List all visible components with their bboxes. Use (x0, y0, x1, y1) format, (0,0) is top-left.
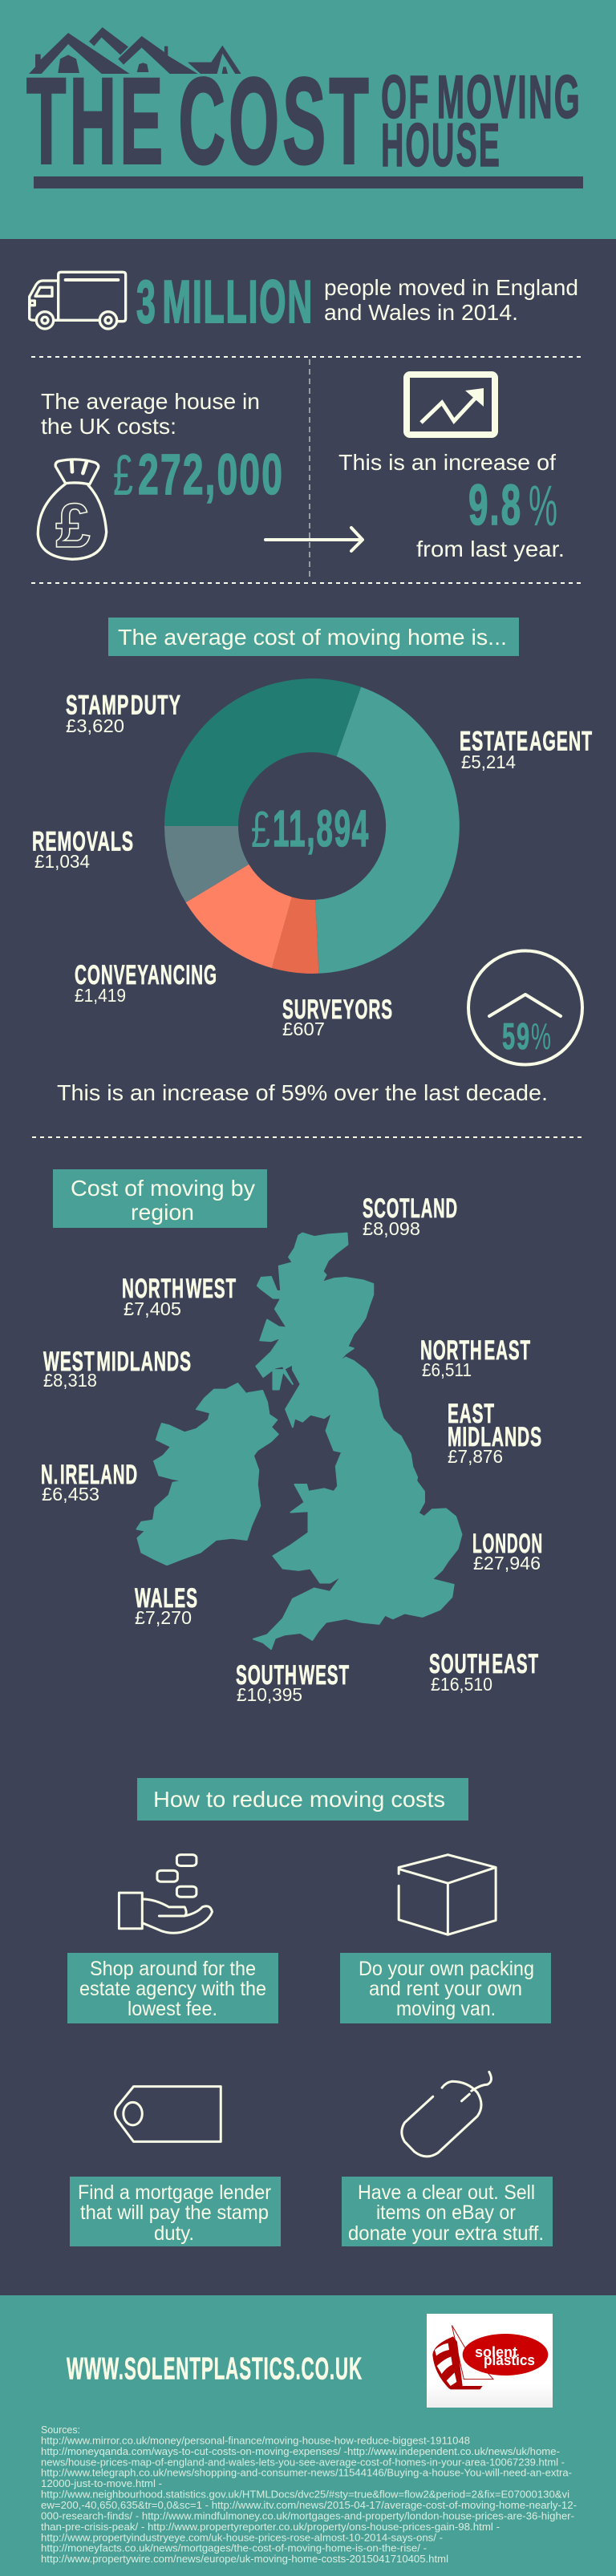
panel: footer (0, 2295, 616, 2576)
icon: 59 percent roof badge: 59 (502, 1015, 531, 1057)
label: removals (32, 826, 134, 872)
donut chart (164, 678, 460, 974)
icon: cardboard box (399, 1855, 496, 1934)
label: stamp duty (66, 690, 181, 736)
label: West Midlands: WEST MIDLANDS (43, 1347, 192, 1377)
donut chart: £ (251, 800, 270, 858)
label: South West: SOUTH WEST (236, 1660, 350, 1691)
sources: ew=200,-40,650,635&tr=0,0&sc=1 - http://www.itv.com/news/2015-04-17/average-cost-of-moving-home-nearly-12- (41, 2499, 577, 2511)
label: North East (420, 1335, 531, 1380)
sources: 12000-just-to-move.html - (41, 2477, 162, 2489)
icon: house roofs (29, 27, 241, 74)
text: average house: the UK costs: (41, 414, 176, 439)
logo: Solent Plastics (427, 2314, 553, 2408)
sources: http://moneyfacts.co.uk/news/mortgages/the-cost-of-moving-home-is-on-the-rise/ - (41, 2542, 427, 2554)
tip: clear out (342, 2177, 553, 2246)
label: N. Ireland: N. IRELAND (41, 1460, 138, 1490)
icon: rising chart (407, 375, 495, 435)
sources: http://www.propertyindustryeye.com/uk-house-prices-rose-almost-10-2014-says-ons/ - (41, 2531, 443, 2543)
text: decade increase: This is an increase of 59% over the last decade. (57, 1080, 548, 1105)
statistic: 9.8 percent: 9.8 (468, 474, 522, 537)
icon: removal truck (30, 272, 126, 329)
icon: 59 percent roof badge (468, 951, 582, 1065)
label: surveyors: SURVEYORS (282, 994, 393, 1025)
text: people moved: people moved in England (324, 275, 578, 300)
tip: own packing: and rent your own (369, 1978, 522, 2000)
label: South West: £10,395 (237, 1684, 302, 1705)
label: conveyancing: CONVEYANCING (75, 960, 217, 990)
header panel (0, 0, 616, 239)
icon: 59 percent roof badge: % (531, 1015, 551, 1057)
label: South East: SOUTH EAST (429, 1649, 539, 1679)
tip: mortgage lender: Find a mortgage lender (78, 2181, 271, 2204)
label: East Midlands: £7,876 (448, 1446, 503, 1467)
label: North East: £6,511 (422, 1359, 472, 1380)
heading: cost by region: Cost of moving by (71, 1176, 255, 1201)
label: Scotland (363, 1193, 458, 1239)
panel: 3 million movers (30, 268, 578, 335)
label: estate agent: £5,214 (461, 751, 516, 772)
text: average house (41, 389, 260, 439)
label: North West (122, 1274, 237, 1319)
icon: price tag (116, 2087, 221, 2141)
tip: own packing: Do your own packing (359, 1958, 534, 1980)
label: conveyancing: £1,419 (75, 985, 126, 1006)
panel: average house price (38, 375, 565, 561)
label: North West: NORTH WEST (122, 1274, 237, 1304)
label: West Midlands: £8,318 (43, 1370, 97, 1391)
tip: mortgage lender (70, 2177, 281, 2246)
tip: mortgage lender: duty. (154, 2222, 194, 2245)
label: Scotland: SCOTLAND (363, 1193, 458, 1224)
sources: Sources: (41, 2424, 80, 2436)
text: from last year: from last year. (416, 537, 565, 561)
tip: shop around: estate agency with the (79, 1978, 266, 2000)
donut chart: 11,894 (273, 800, 370, 857)
title: HOUSE (381, 111, 501, 180)
tip: clear out: items on eBay or (376, 2201, 516, 2224)
heading: reduce costs: How to reduce moving costs (153, 1787, 445, 1812)
logo: Solent Plastics: plastics (484, 2352, 535, 2368)
text: average house: The average house in (41, 389, 260, 414)
tip: shop around: lowest fee. (128, 1998, 217, 2020)
text: people moved (324, 275, 578, 325)
statistic: 272,000: 272,000 (138, 444, 284, 507)
logo: Solent Plastics: solent (475, 2344, 517, 2360)
heading: cost by region: region (131, 1200, 194, 1225)
label: London: LONDON (472, 1529, 543, 1559)
label: South West (236, 1660, 350, 1705)
map: UK and Ireland (136, 1233, 462, 1649)
heading: average cost (108, 618, 519, 656)
statistic: 9.8 percent: % (529, 475, 557, 538)
statistic: 3 million: 3 MILLION (136, 268, 314, 335)
heading: cost by region (53, 1169, 267, 1228)
label: East Midlands (448, 1399, 542, 1467)
tip: clear out: donate your extra stuff. (348, 2222, 544, 2245)
sources: than-pre-crisis-peak/ - http://www.propertyreporter.co.uk/property/ons-house-prices-gain-98.html - (41, 2521, 500, 2533)
label: Wales: £7,270 (135, 1607, 192, 1628)
panel: cost by region (41, 1169, 543, 1705)
label: South East (429, 1649, 539, 1695)
tip: mortgage lender: that will pay the stamp (80, 2201, 269, 2224)
panel: cost of moving (32, 618, 593, 1105)
sources: http://www.mirror.co.uk/money/personal-finance/moving-house-how-reduce-biggest-1911048 (41, 2434, 470, 2446)
panel: how to reduce costs (67, 1778, 553, 2246)
statistic: 272,000: £ (113, 444, 133, 508)
label: removals: REMOVALS (32, 826, 134, 857)
text: people moved: and Wales in 2014. (324, 300, 518, 325)
label: stamp duty: £3,620 (66, 715, 124, 736)
heading: average cost: The average cost of moving home is... (118, 625, 507, 650)
sources: http://www.neighbourhood.statistics.gov.uk/HTMLDocs/dvc25/#sty=true&flow=flow2&period=2&fix=E07000130&vi (41, 2489, 569, 2501)
label: West Midlands (43, 1347, 192, 1391)
icon: hand with coins (119, 1855, 212, 1933)
sources: 000-research-finds/ - http://www.mindfulmoney.co.uk/mortgages-and-property/london-house-prices-are-36-higher- (41, 2509, 574, 2521)
sources: http://www.propertywire.com/news/europe/uk-moving-home-costs-2015041710405.html (41, 2553, 448, 2565)
label: Wales (135, 1583, 198, 1628)
label: removals: £1,034 (34, 851, 90, 872)
statistic: 272,000 (113, 444, 284, 508)
sources: http://moneyqanda.com/ways-to-cut-costs-on-moving-expenses/ -http://www.independent.co.uk/news/uk/home- (41, 2445, 560, 2457)
label: East Midlands: MIDLANDS (448, 1422, 542, 1452)
label: South East: £16,510 (431, 1674, 492, 1695)
label: stamp duty: STAMP DUTY (66, 690, 181, 720)
sources (41, 2424, 577, 2565)
tip: own packing: moving van. (396, 1998, 496, 2020)
tip: shop around: Shop around for the (90, 1958, 256, 1980)
label: surveyors (282, 994, 393, 1039)
label: London: £27,946 (473, 1553, 541, 1574)
label: North East: NORTH EAST (420, 1335, 531, 1366)
icon: computer mouse (402, 2072, 491, 2157)
label: Scotland: £8,098 (363, 1218, 420, 1239)
tip: shop around (67, 1953, 278, 2023)
label: North West: £7,405 (124, 1298, 181, 1319)
sources: http://www.telegraph.co.uk/news/shopping-and-consumer-news/11544146/Buying-a-house-You-will-need-an-extra- (41, 2467, 572, 2479)
icon: money bag (38, 460, 107, 561)
label: London (472, 1529, 543, 1574)
label: N. Ireland: £6,453 (42, 1484, 99, 1505)
label: Wales: WALES (135, 1583, 198, 1614)
sources: news/house-prices-map-of-england-and-wales-lets-you-see-average-cost-of-homes-in-your-area-10067239.html - (41, 2456, 565, 2468)
website: WWW.SOLENTPLASTICS.CO.UK (67, 2351, 363, 2387)
label: conveyancing (75, 960, 217, 1006)
text: increase: This is an increase of (338, 450, 556, 475)
label: N. Ireland (41, 1460, 138, 1505)
icon: money bag: £ (55, 490, 91, 561)
label: surveyors: £607 (282, 1019, 325, 1039)
arrow (265, 528, 363, 551)
tip: own packing (340, 1953, 551, 2023)
tip: clear out: Have a clear out. Sell (358, 2181, 535, 2204)
heading: reduce costs (137, 1778, 468, 1821)
label: estate agent (460, 727, 593, 772)
label: East Midlands: EAST (448, 1399, 495, 1429)
